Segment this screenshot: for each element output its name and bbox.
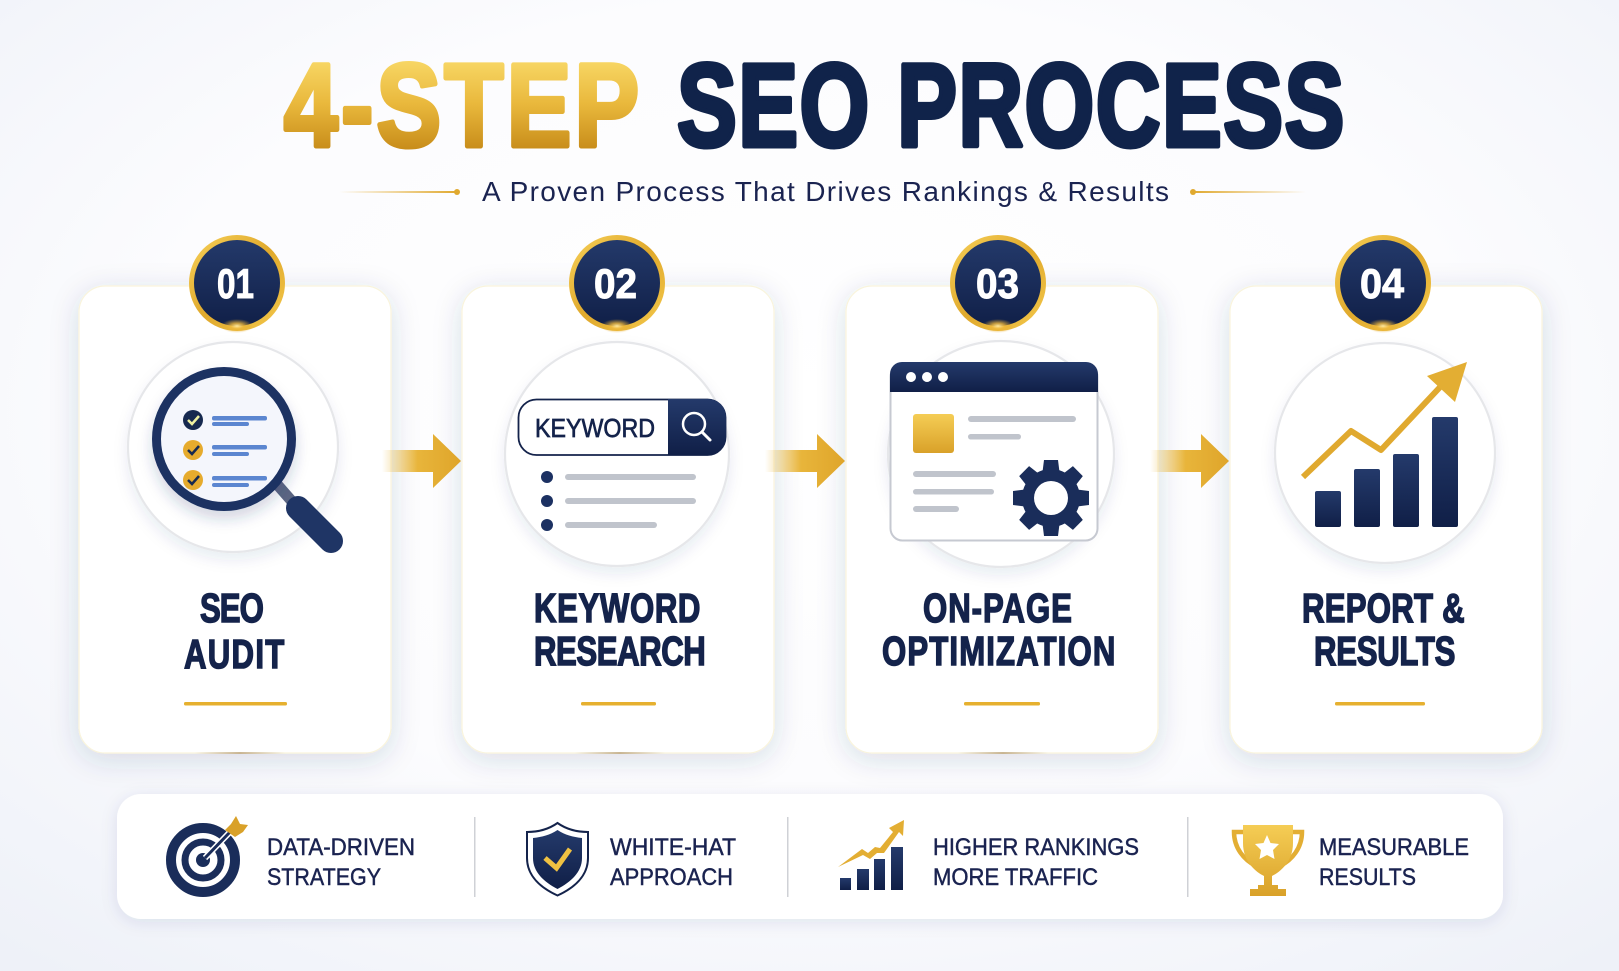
title: gold part: 4-STEP xyxy=(284,39,639,171)
title xyxy=(284,39,1344,172)
heading: On-Page Optimization: OPTIMIZATION xyxy=(882,628,1115,674)
label: higher rankings more traffic: HIGHER RANKINGS xyxy=(933,834,1139,861)
heading: SEO Audit: SEO xyxy=(200,585,264,631)
badge: 03: 03 xyxy=(976,260,1019,307)
heading: On-Page Optimization: ON-PAGE xyxy=(923,585,1072,631)
heading: SEO Audit xyxy=(184,585,284,677)
badge: 04: 04 xyxy=(1360,260,1405,307)
arrow: step 2 to 3 xyxy=(765,434,845,488)
panel: step 3 on-page optimization xyxy=(846,286,1158,754)
icon: keyword search box xyxy=(505,342,729,566)
heading: Report & Results xyxy=(1302,585,1465,674)
arrow: step 3 to 4 xyxy=(1150,434,1229,488)
heading: Keyword Research: RESEARCH xyxy=(534,628,706,674)
icon: browser window with gear xyxy=(888,341,1114,567)
panel: benefits strip xyxy=(117,794,1503,919)
icon: growth bar chart xyxy=(1275,343,1495,563)
label: measurable results: RESULTS xyxy=(1319,864,1416,891)
heading: Report & Results: RESULTS xyxy=(1314,628,1455,674)
heading: SEO Audit: AUDIT xyxy=(184,631,284,677)
badge: 02: 02 xyxy=(594,260,637,307)
heading: Keyword Research: KEYWORD xyxy=(534,585,700,631)
badge: 04 xyxy=(1338,238,1428,333)
panel: step 1 SEO audit xyxy=(79,286,391,754)
badge: 02 xyxy=(572,238,662,333)
icon: small growth chart xyxy=(838,820,904,890)
panel: step 2 keyword research xyxy=(462,286,774,754)
icon: trophy xyxy=(1234,825,1302,896)
label: white-hat approach xyxy=(610,834,736,891)
heading: Report & Results: REPORT & xyxy=(1302,585,1465,631)
label: data-driven strategy xyxy=(267,834,415,891)
heading: On-Page Optimization xyxy=(882,585,1115,674)
icon: target with arrow xyxy=(171,816,248,892)
label: measurable results xyxy=(1319,834,1469,891)
label: data-driven strategy: DATA-DRIVEN xyxy=(267,834,415,861)
label: white-hat approach: WHITE-HAT xyxy=(610,834,736,861)
badge: 01: 01 xyxy=(217,260,254,307)
subtitle: A Proven Process That Drives Rankings & Results xyxy=(482,176,1169,207)
label: measurable results: MEASURABLE xyxy=(1319,834,1469,861)
icon: keyword search box: KEYWORD xyxy=(535,413,655,443)
badge: 01 xyxy=(192,238,282,333)
label: data-driven strategy: STRATEGY xyxy=(267,864,381,891)
icon: shield with check xyxy=(527,823,588,896)
panel: step 4 report and results xyxy=(1230,286,1542,753)
badge: 03 xyxy=(952,238,1044,333)
label: higher rankings more traffic: MORE TRAFFIC xyxy=(933,864,1098,891)
label: white-hat approach: APPROACH xyxy=(610,864,733,891)
arrow: step 1 to 2 xyxy=(382,434,461,488)
title: navy part: SEO PROCESS xyxy=(677,40,1344,172)
icon: magnifying glass audit xyxy=(128,342,338,552)
heading: Keyword Research xyxy=(534,585,706,674)
label: higher rankings more traffic xyxy=(933,834,1139,891)
